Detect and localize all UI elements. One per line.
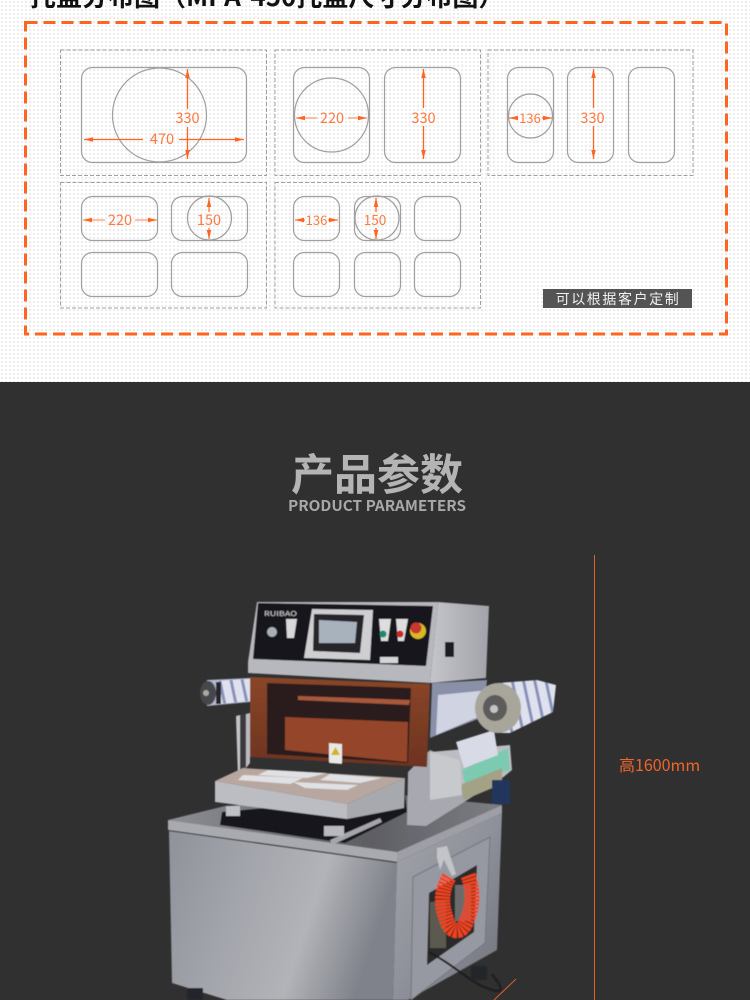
air gun bbox=[437, 846, 456, 876]
casters bbox=[187, 966, 487, 1000]
layout 2: two 220x330 trays: 220 bbox=[320, 107, 344, 128]
right film roll bbox=[475, 680, 556, 733]
black control panel: RUIBAO bbox=[264, 608, 297, 618]
heading: product parameters: PRODUCT PARAMETERS bbox=[288, 495, 466, 516]
left column bbox=[236, 713, 250, 778]
amber safety window bbox=[250, 677, 430, 767]
layout 5: six 136x150 trays: 150 bbox=[364, 209, 386, 229]
layout 5: six 136x150 trays bbox=[275, 182, 480, 308]
warning sticker bbox=[329, 743, 342, 764]
height dimension line bbox=[594, 555, 596, 1000]
layout 1: single 470x330 tray bbox=[60, 50, 266, 176]
layout 5: six 136x150 trays: 136 bbox=[306, 210, 327, 229]
tray table bbox=[215, 768, 405, 819]
front bezel bbox=[248, 602, 438, 683]
depth dimension line bbox=[494, 979, 516, 1000]
layout 4: four 220x150 trays: 220 bbox=[108, 209, 132, 230]
control box side bbox=[430, 602, 489, 683]
layout 1: single 470x330 tray: 330 bbox=[175, 107, 200, 128]
custom note label: 可以根据客户定制 bbox=[556, 289, 680, 309]
machine photo illustration bbox=[168, 602, 556, 1000]
layout 4: four 220x150 trays bbox=[60, 182, 266, 308]
lifting mechanism bbox=[220, 795, 407, 845]
cabinet window with wiring bbox=[427, 865, 477, 965]
layout 4: four 220x150 trays: 150 bbox=[197, 209, 221, 230]
film sheet and rollers bbox=[430, 730, 512, 804]
switch on box side bbox=[445, 642, 454, 657]
black control panel bbox=[253, 603, 433, 666]
layout 3: three 136x330 trays: 136 bbox=[519, 108, 541, 127]
layout 3: three 136x330 trays: 330 bbox=[580, 107, 605, 128]
height label: 高1600mm bbox=[619, 752, 700, 776]
panel: dark product parameters background bbox=[0, 382, 750, 1000]
layout 2: two 220x330 trays bbox=[275, 50, 480, 176]
black cable bbox=[428, 952, 501, 991]
heading: product parameters: 产品参数 bbox=[291, 441, 463, 503]
left film roll bbox=[200, 678, 250, 706]
orange coiled hose bbox=[443, 875, 472, 931]
layout 2: two 220x330 trays: 330 bbox=[411, 107, 436, 128]
layout 1: single 470x330 tray: 470 bbox=[150, 128, 174, 149]
steel pillar bbox=[407, 750, 480, 826]
panel: orange dashed frame bbox=[26, 22, 726, 334]
dotted background bbox=[0, 0, 750, 382]
machine cabinet bbox=[168, 795, 502, 1000]
film feed plate bbox=[430, 680, 487, 738]
layout 3: three 136x330 trays bbox=[488, 50, 693, 176]
